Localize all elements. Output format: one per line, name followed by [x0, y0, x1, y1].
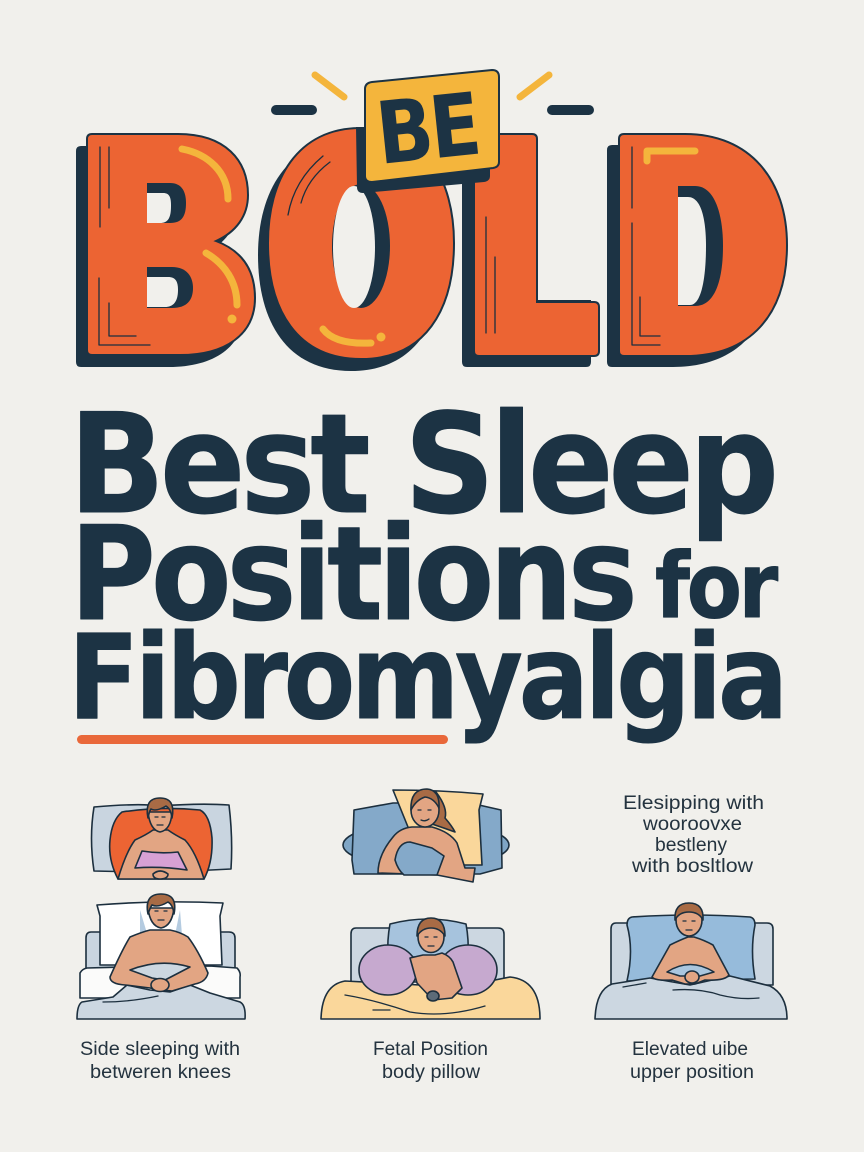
caption: side sleeping: Side sleeping with	[80, 1039, 240, 1060]
badge: BE: BE	[372, 75, 483, 185]
caption: elevated position	[630, 1039, 754, 1083]
illustration: back with white pillow and blanket	[77, 894, 245, 1019]
illustration: back with orange pillow	[92, 798, 232, 879]
caption: fetal position: body pillow	[382, 1062, 480, 1083]
logo: BE BOLD lettering	[76, 70, 787, 371]
caption: side sleeping: betweren knees	[90, 1062, 231, 1083]
title: Best Sleep Positions for Fibromyalgia: Positions	[70, 498, 633, 650]
caption: elevated position: Elevated uibe	[632, 1039, 748, 1060]
illustration: elevated upper position	[595, 903, 787, 1019]
caption: elevated position: upper position	[630, 1062, 754, 1083]
title underline	[77, 735, 448, 744]
rays around badge	[276, 75, 589, 110]
caption: fetal position	[373, 1039, 488, 1083]
illustration: fetal position with body pillow	[321, 918, 540, 1019]
title: Best Sleep Positions for Fibromyalgia	[68, 384, 784, 746]
caption: top right: with bosltlow	[631, 856, 753, 877]
letter O	[258, 128, 454, 371]
caption: fetal position: Fetal Position	[373, 1039, 488, 1060]
letter D	[607, 134, 787, 367]
caption: top right: Elesipping with	[623, 793, 764, 814]
caption: top right: bestleny	[655, 835, 727, 856]
caption: side sleeping	[80, 1039, 240, 1083]
title: Best Sleep Positions for Fibromyalgia: Fibromyalgia	[68, 609, 784, 746]
illustration: side position with yellow pillow	[343, 789, 509, 882]
title: Best Sleep Positions for Fibromyalgia: Best Sleep	[69, 384, 774, 545]
caption: top right: wooroovxe	[642, 814, 742, 835]
caption: top right	[623, 793, 764, 877]
letter L	[462, 134, 599, 367]
letter B	[76, 134, 255, 367]
title: Best Sleep Positions for Fibromyalgia: for	[655, 534, 779, 639]
